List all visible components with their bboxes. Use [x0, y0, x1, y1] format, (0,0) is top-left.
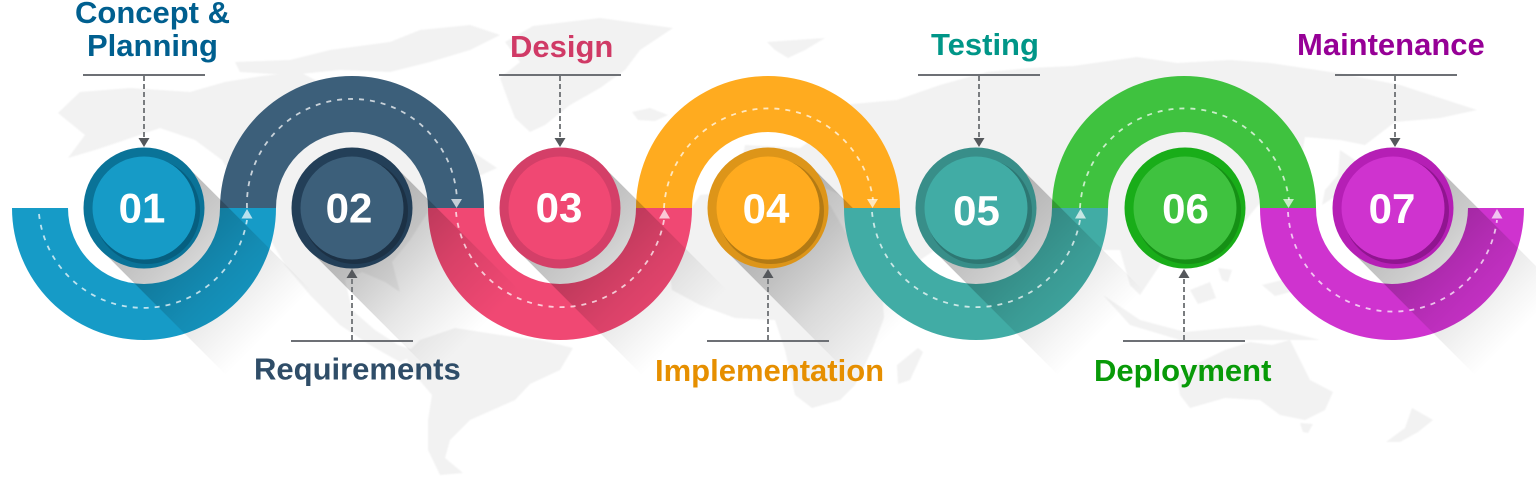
connector 1	[83, 75, 205, 147]
arc 1	[12, 208, 276, 340]
connector 3	[499, 75, 621, 147]
label: Requirements: Requirements	[254, 352, 461, 386]
arcs 5 to 7 with shadows	[844, 76, 1536, 398]
shadow circle 2	[310, 166, 542, 398]
circle 01: 01	[119, 184, 165, 232]
label: Maintenance: Maintenance	[1297, 27, 1485, 62]
circle 04: 04	[743, 185, 790, 232]
map: Greenland	[500, 18, 673, 132]
flow line arc 6	[1080, 108, 1289, 208]
flow line arc 4	[664, 108, 873, 208]
circle 04	[708, 148, 828, 268]
arc 5	[844, 208, 1108, 340]
arrowhead arc 3	[659, 209, 670, 218]
map: Africa	[668, 190, 884, 408]
label: Testing: Testing	[931, 27, 1039, 62]
map: Australia	[1177, 340, 1333, 420]
arc 6	[1052, 76, 1316, 208]
label: Deployment: Deployment	[1094, 353, 1271, 388]
map: Indonesia and Philippines	[1103, 268, 1320, 340]
shadow circle 4	[726, 166, 958, 398]
label: Concept & Planning: Planning	[87, 28, 218, 63]
map: Japan	[1322, 150, 1355, 205]
shadow circle 1	[102, 166, 334, 398]
circle 07	[1332, 148, 1454, 268]
arrowhead arc 5	[1075, 209, 1086, 218]
label: Concept & Planning	[75, 0, 230, 63]
circle 05: 05	[953, 187, 1000, 234]
arc 4	[636, 76, 900, 208]
flow line arc 5	[872, 212, 1080, 307]
circle 02: 02	[326, 184, 372, 232]
map: North America	[58, 72, 497, 362]
map: New Zealand	[1386, 408, 1433, 442]
flow line arc 1	[39, 214, 247, 308]
arrowhead arc 2	[451, 199, 462, 208]
shadow circle 7	[1351, 166, 1536, 398]
connector 2	[291, 269, 413, 341]
dashed flow lines on arcs	[39, 99, 1497, 312]
flow arrowheads	[242, 199, 1502, 218]
arrowhead arc 7	[1492, 209, 1502, 218]
connector 5	[918, 75, 1040, 147]
arrowhead arc 4	[867, 199, 878, 208]
circle 05	[916, 148, 1036, 268]
circle 01	[84, 148, 204, 268]
map: Iceland	[632, 108, 668, 121]
flow line arc 2	[247, 99, 457, 208]
map: Eurasia	[740, 57, 1477, 300]
map: South America	[405, 328, 573, 475]
arcs 1 to 4 with long shadows of circles 1 to 4	[12, 76, 958, 398]
arrowhead arc 6	[1283, 199, 1294, 208]
label: Implementation: Implementation	[655, 353, 884, 388]
shadow circle 5	[934, 166, 1166, 398]
arc 3	[428, 208, 692, 340]
map: Tasmania	[1300, 423, 1313, 433]
circle 06	[1124, 148, 1246, 268]
shadow circle 3	[518, 166, 750, 398]
flow line arc 7	[1288, 212, 1497, 312]
circle 03: 03	[536, 184, 582, 231]
map: Arctic islands	[235, 25, 500, 75]
flow line arc 3	[456, 212, 664, 307]
circle 06: 06	[1162, 185, 1209, 232]
step labels	[75, 0, 1485, 388]
connector 4	[707, 269, 829, 341]
map: Madagascar	[897, 348, 923, 384]
connector 7	[1335, 75, 1457, 147]
circle 07: 07	[1369, 185, 1415, 232]
numbered circles	[84, 148, 1454, 268]
connectors	[83, 75, 1457, 341]
connector 6	[1123, 269, 1245, 341]
arrowhead arc 1	[242, 209, 252, 218]
label: Design: Design	[510, 29, 613, 64]
arc 7	[1260, 208, 1524, 340]
circle 03	[500, 148, 620, 268]
map: Svalbard	[767, 38, 825, 58]
circle 02	[292, 148, 412, 268]
arc 2	[220, 76, 484, 208]
